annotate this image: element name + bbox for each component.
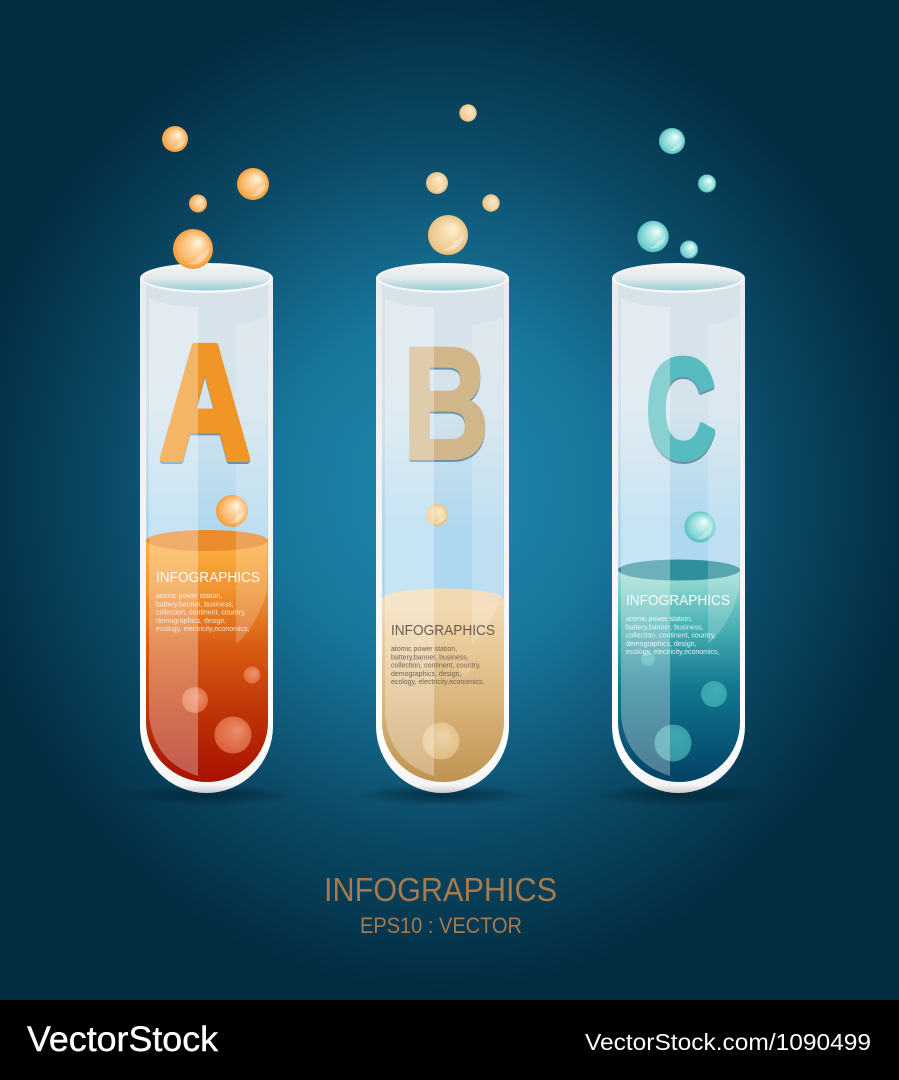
tube B text: INFOGRAPHICS: [391, 622, 495, 639]
liquid surface B: [382, 588, 504, 610]
test tube A: [119, 263, 295, 806]
test tube B: [355, 263, 531, 806]
tube C text: ecology, electricity,economics,: [626, 649, 720, 656]
tube A text: battery,banner, business,: [156, 601, 234, 608]
tube B text: battery,banner, business,: [391, 654, 469, 661]
rising bubbles C: [637, 128, 716, 258]
rising bubbles A: [162, 126, 269, 269]
tube C text: [626, 592, 730, 656]
tube B glass interior: [382, 280, 504, 782]
tube C text: battery,banner, business,: [626, 624, 704, 631]
tube A text: collection, continent, country,: [156, 610, 246, 617]
tube A text: [156, 569, 260, 633]
footer bar: [0, 1000, 899, 1080]
tube B text: demographics, design,: [391, 671, 461, 678]
tube A shadow: [119, 784, 295, 806]
letter B: B: [403, 316, 489, 494]
tube B text: ecology, electricity,economics,: [391, 679, 485, 686]
tube A text: demographics, design,: [156, 618, 226, 625]
tube C text: collection, continent, country,: [626, 633, 716, 640]
bubble in glass C: [684, 512, 716, 542]
left glass highlight: [149, 298, 198, 776]
left glass highlight: [621, 298, 670, 776]
tube B text: atomic power station,: [391, 646, 457, 653]
tube C text: atomic power station,: [626, 616, 692, 623]
liquid B: [382, 599, 504, 782]
liquid bubbles C: [641, 652, 727, 762]
bubble in glass B: [426, 504, 448, 526]
rising bubbles B: [426, 104, 500, 255]
tube B rim: [376, 263, 509, 293]
tube B shadow: [355, 784, 531, 806]
tube A glass wall: [140, 278, 273, 793]
liquid C: [618, 570, 740, 782]
test tube C: [591, 263, 767, 806]
right glass highlight: [472, 316, 503, 644]
footer logo: VectorStock: [27, 1020, 219, 1059]
tube A text: atomic power station,: [156, 593, 222, 600]
letter C: C: [646, 330, 716, 490]
tube A rim: [140, 263, 273, 293]
liquid bubbles A: [182, 666, 260, 754]
liquid bubbles B: [422, 662, 471, 760]
subtitle: EPS10 : VECTOR: [360, 913, 522, 938]
tube C glass interior: [618, 280, 740, 782]
liquid surface C: [618, 560, 740, 580]
liquid surface A: [146, 530, 268, 551]
tube B glass wall: [376, 278, 509, 793]
tube A text: ecology, electricity,economics,: [156, 626, 250, 633]
tube A text: INFOGRAPHICS: [156, 569, 260, 586]
letter B: B: [403, 314, 489, 492]
tube B text: collection, continent, country,: [391, 663, 481, 670]
tube B text: [391, 622, 495, 686]
left glass highlight: [385, 298, 434, 776]
tube C shadow: [591, 784, 767, 806]
right glass highlight: [236, 316, 267, 644]
liquid A: [146, 540, 268, 782]
tube C glass wall: [612, 278, 745, 793]
title: INFOGRAPHICS: [324, 871, 557, 908]
tube C text: INFOGRAPHICS: [626, 592, 730, 609]
footer url: VectorStock.com/1090499: [585, 1029, 871, 1055]
bubble in glass A: [216, 495, 248, 527]
letter A: A: [159, 311, 251, 493]
letter A: A: [159, 313, 251, 495]
tube A glass interior: [146, 280, 268, 782]
tube C text: demographics, design,: [626, 641, 696, 648]
tube C rim: [612, 263, 745, 293]
right glass highlight: [708, 316, 739, 644]
letter C: C: [646, 328, 716, 488]
